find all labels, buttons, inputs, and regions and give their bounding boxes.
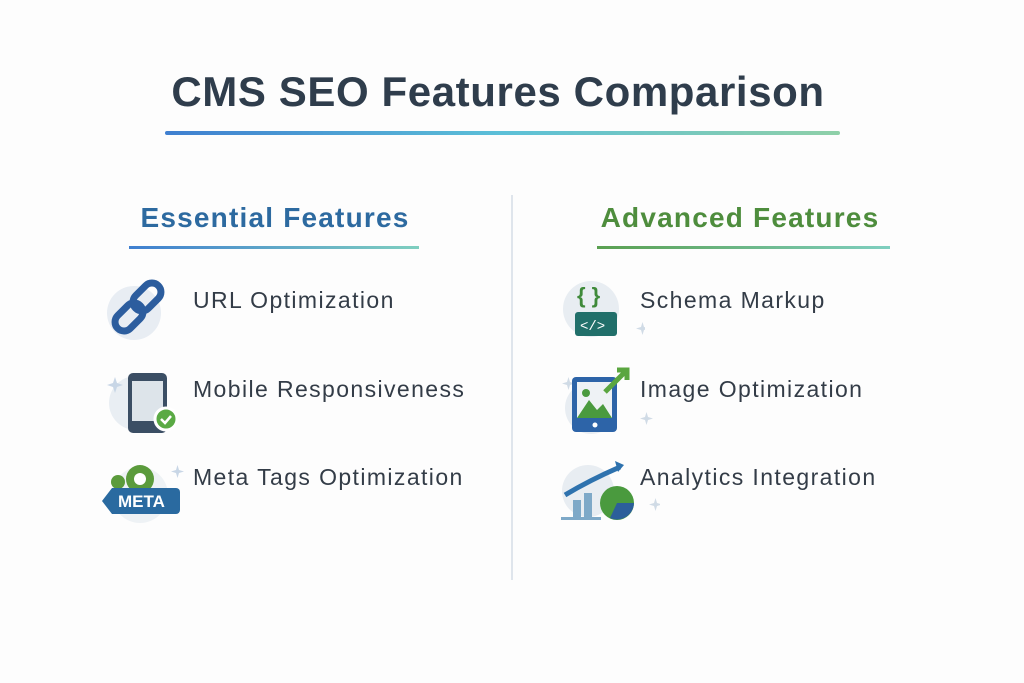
divider — [511, 195, 513, 580]
item: Mobile Responsiveness — [108, 373, 465, 433]
icon: phone with check — [108, 373, 176, 433]
item: Schema Markup: Schema Markup — [640, 287, 826, 313]
icon: code: { } — [577, 283, 601, 308]
heading: essential: Essential Features — [140, 202, 410, 233]
icon: image with arrow — [562, 368, 652, 434]
icon: meta tag with gear — [102, 465, 184, 523]
title: CMS SEO Features Comparison — [171, 68, 825, 115]
item: Mobile Responsiveness: Mobile Responsiveness — [193, 376, 465, 402]
item: Meta Tags Optimization — [102, 464, 464, 523]
item: Analytics Integration — [561, 461, 877, 520]
icon: code: </> — [580, 319, 605, 335]
item: Image Optimization: Image Optimization — [640, 376, 863, 402]
item: URL Optimization — [107, 280, 395, 340]
icon: analytics chart — [561, 461, 660, 520]
icon: chain link — [107, 280, 164, 340]
item: Analytics Integration: Analytics Integration — [640, 464, 877, 490]
item: Image Optimization — [562, 368, 863, 434]
item: URL Optimization: URL Optimization — [193, 287, 395, 313]
heading: advanced: Advanced Features — [601, 202, 879, 233]
item: Schema Markup — [563, 281, 826, 337]
icon: meta tag with gear: META — [118, 492, 165, 511]
item: Meta Tags Optimization: Meta Tags Optimization — [193, 464, 464, 490]
title underline — [165, 131, 840, 135]
icon: code — [563, 281, 645, 337]
